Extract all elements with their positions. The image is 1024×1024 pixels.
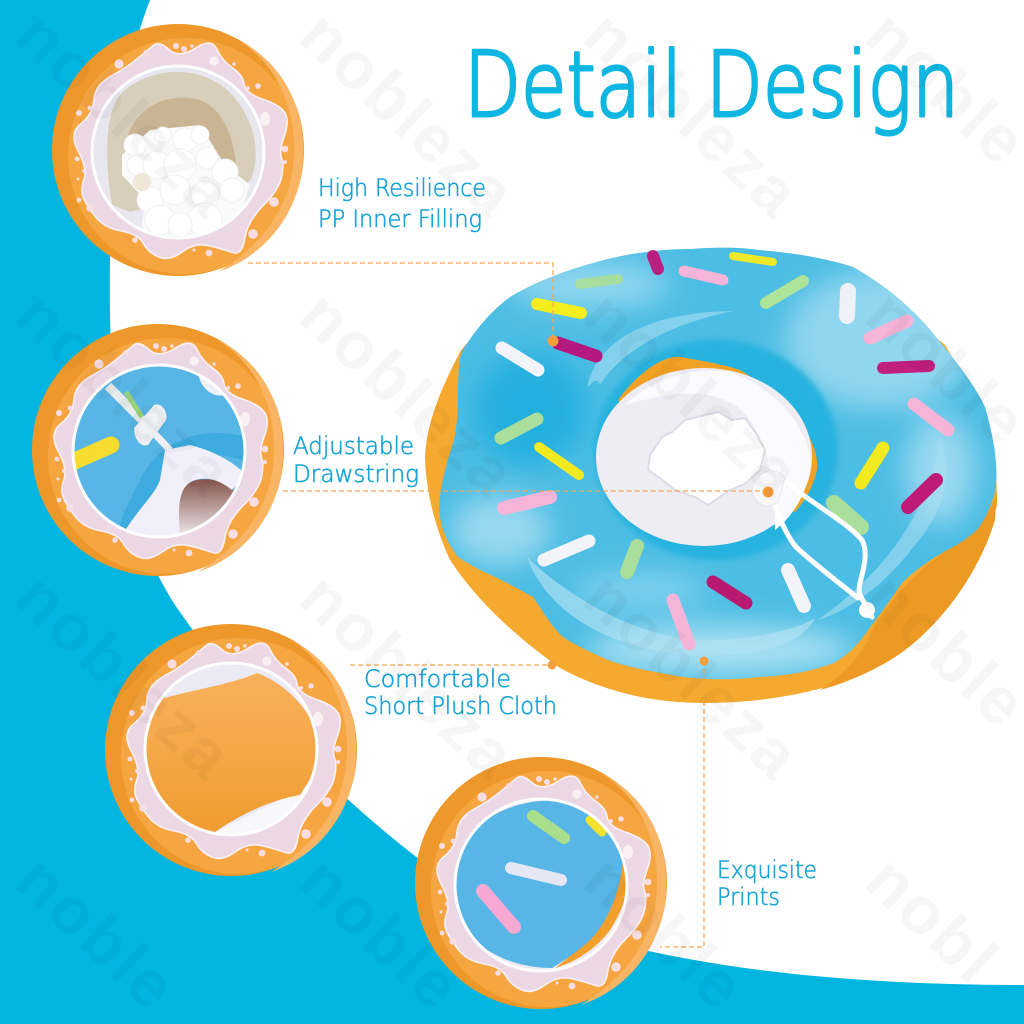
blue icing: [420, 240, 1010, 690]
white ruffled inner collar: [596, 368, 812, 546]
label: adjustable drawstring: Adjustable: [293, 432, 414, 460]
label: adjustable drawstring: Drawstring: [293, 460, 419, 488]
badge: inner filling: [52, 24, 304, 276]
cotton balls: [122, 125, 250, 240]
watermark: nobleza: [286, 0, 532, 232]
yellow sprinkle: [70, 445, 111, 463]
watermark: nobleza: [2, 558, 248, 794]
watermark: nobleza: [286, 276, 532, 512]
label: high resilience: High Resilience: [318, 174, 486, 202]
leader dots: [548, 336, 774, 670]
cloth knot: [122, 445, 246, 536]
badge: plush cloth: [105, 624, 357, 876]
darker band: [120, 433, 244, 529]
label: short plush cloth: Comfortable: [364, 665, 511, 693]
cords and toggle: [108, 386, 142, 420]
badge: drawstring: [32, 324, 284, 576]
light swirl highlights: [587, 311, 733, 387]
inner dark ring: [594, 340, 838, 560]
watermark: nobleza: [570, 0, 816, 232]
watermark: nobleza: [286, 558, 532, 794]
drawstring: [752, 471, 875, 618]
watermark: nobleza: [2, 276, 248, 512]
watermark: nobleza: [570, 276, 816, 512]
leader lines: [248, 263, 768, 947]
crochet cover: [107, 72, 256, 212]
label: exquisite prints: Prints: [717, 883, 780, 911]
main product: blue donut cone: [420, 240, 1010, 703]
watermark: noble: [2, 841, 193, 1024]
watermark: noble: [286, 841, 477, 1024]
badge: exquisite prints: [415, 757, 667, 1009]
watermark: nobl: [852, 841, 1014, 998]
sprinkles: [501, 256, 948, 644]
patch of white at top right: [198, 376, 222, 396]
label: short plush cloth: Short Plush Cloth: [364, 692, 557, 720]
label: high resilience: PP Inner Filling: [318, 205, 482, 233]
orange donut base: [425, 278, 997, 703]
orange crescent at hole: [618, 357, 817, 512]
label: exquisite prints: Exquisite: [717, 856, 817, 884]
watermark: nobleza: [570, 558, 816, 794]
watermark: noble: [570, 841, 761, 1024]
centre hole: [648, 412, 765, 505]
cloth opening: [178, 479, 234, 535]
watermark: nobleza: [2, 0, 248, 232]
